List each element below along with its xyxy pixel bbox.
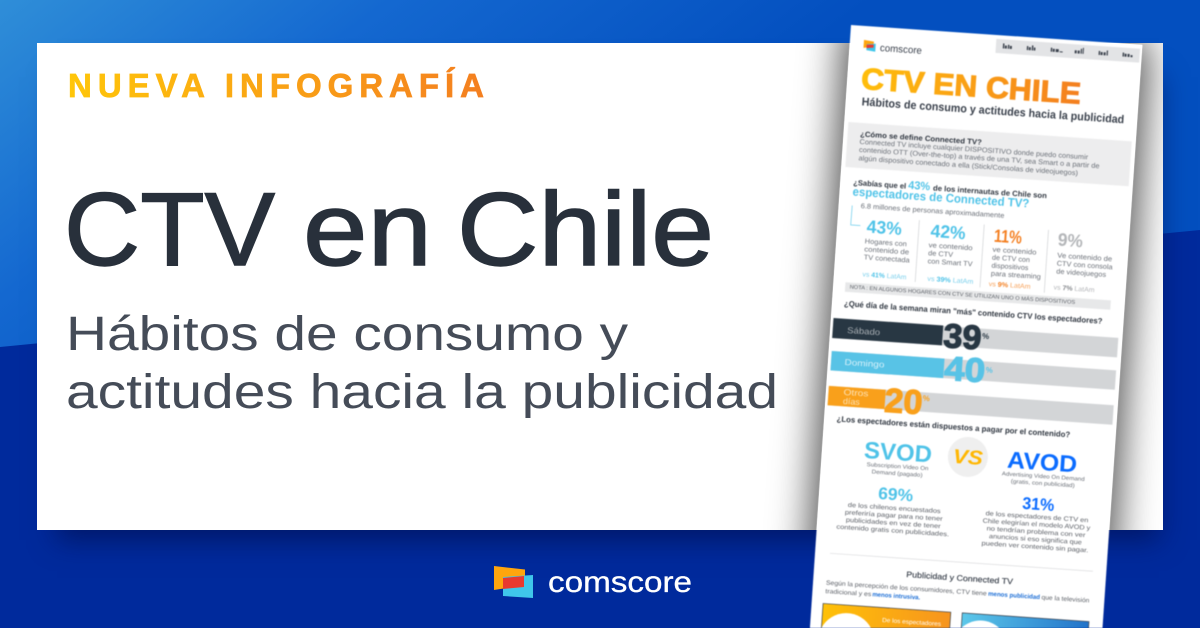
card: orange: De los espectadores [882, 618, 941, 628]
bar: otros días: 20 [883, 382, 924, 422]
panel: svod: Subscription Video On [866, 462, 929, 472]
stat: consola 9%: 9% [1057, 230, 1084, 251]
panel: avod: (gratis, con publicidad) [1011, 479, 1075, 489]
stat: streaming 11%: para streaming [991, 271, 1041, 281]
heading: 43%: 6.8 millones de personas aproximadamente [860, 203, 1005, 220]
bar: sábado [832, 310, 1119, 367]
comscore logo: comscore [548, 566, 692, 599]
document shadow [778, 43, 1163, 530]
stat: smart tv 42%: vs 39% LatAm [927, 276, 974, 286]
panel: avod: AVOD [1006, 447, 1078, 477]
stat: streaming 11%: vs 9% LatAm [988, 281, 1031, 291]
note bar: NOTA : EN ALGUNOS HOGARES CON CTV SE UTILIZAN UNO O MÁS DISPOSITIVOS [849, 284, 1076, 306]
stat: hogares 43%: 43% [866, 217, 902, 239]
heading: 43%: 43% [908, 180, 931, 193]
panel: svod: de los chilenos encuestados [848, 502, 941, 515]
bar: otros días: Otros [843, 387, 869, 399]
main title [64, 172, 714, 288]
panel: svod: preferiría pagar para no tener [845, 509, 944, 523]
document logo [863, 40, 923, 57]
stat: hogares 43% [862, 216, 913, 281]
stat: streaming 11%: dispositivos [991, 263, 1029, 272]
main title: Chile [457, 172, 714, 288]
stat: smart tv 42%: con Smart TV [927, 258, 973, 268]
stat: smart tv 42% [926, 221, 978, 286]
bar chart: days of the week [827, 310, 1119, 435]
stat: smart tv 42%: de CTV [928, 250, 954, 259]
main title: en [303, 172, 432, 288]
bar: sábado: % [982, 332, 989, 341]
document logo: comscore [880, 43, 923, 57]
bar: otros días [827, 378, 1114, 435]
bar: sábado: Sábado [847, 325, 881, 337]
subtitle: actitudes hacia la publicidad [66, 366, 778, 419]
panel: definition: algún dispositivo conectado a ella (Stick/Consolas de videojuegos) [858, 155, 1078, 177]
heading: 43% [851, 176, 1048, 223]
panel: svod: contenido gratis con publicidades. [836, 524, 950, 538]
stat: streaming 11%: ve contenido [992, 247, 1037, 257]
panel: avod: 31% [1022, 494, 1055, 515]
main title: CTV [64, 172, 275, 288]
panel: avod: anuncios si eso significa que [989, 533, 1083, 546]
heading: 43%: de los internautas de Chile son [933, 183, 1048, 200]
bar: domingo: Domingo [844, 357, 885, 370]
advertising text: tradicional y es [825, 588, 872, 598]
stat: hogares 43%: vs 41% LatAm [862, 271, 907, 281]
stat: streaming 11% [988, 226, 1044, 291]
advertising text: menos publicidad [988, 591, 1040, 601]
stat: hogares 43%: Hogares con [865, 238, 907, 248]
eyebrow: nueva infografía: NUEVA INFOGRAFÍA [68, 67, 484, 104]
panel: definition: contenido OTT (Over-the-top) a través de una TV, sea Smart o a partir de [859, 147, 1100, 170]
stat: smart tv 42%: 42% [930, 221, 966, 243]
panel: avod: pueden ver contenido sin pagar. [981, 540, 1089, 554]
panel: avod [981, 445, 1096, 554]
heading: 43%: espectadores de Connected TV? [852, 185, 1030, 211]
document subtitle: Hábitos de consumo y actitudes hacia la publicidad [861, 96, 1125, 126]
card: blue [961, 613, 1089, 628]
panel: definition: Connected TV incluye cualquier DISPOSITIVO donde puedo consumir [859, 139, 1089, 161]
partner logos strip [995, 39, 1140, 63]
subtitle: Hábitos de consumo y [66, 308, 628, 361]
stat: smart tv 42%: ve contenido [928, 242, 973, 252]
comscore logo [494, 566, 692, 599]
stat: consola 9% [1053, 230, 1115, 295]
arrow connector [851, 205, 862, 226]
panel: svod: 69% [878, 484, 914, 505]
heading: 43%: ¿Sabías que el [853, 178, 906, 191]
stat: streaming 11%: 11% [993, 226, 1023, 248]
panel: svod: SVOD [863, 437, 933, 467]
heading: día de la semana: ¿Qué día de la semana miran "más" contenido CTV los espectadores? [844, 299, 1103, 326]
panel: definition: ¿Cómo se define Connected TV? [860, 129, 983, 147]
advertising text [825, 580, 1090, 613]
panel: avod: Advertising Video On Demand [1002, 471, 1085, 483]
vs badge [947, 436, 989, 478]
stat: hogares 43%: contenido de [864, 246, 909, 256]
advertising text: menos intrusiva. [872, 591, 921, 602]
panel: avod: no tendrían problema con ver [986, 525, 1087, 539]
panel: avod: Chile elegirían el modelo AVOD y [982, 518, 1091, 532]
note bar [845, 282, 1111, 310]
stat: hogares 43%: TV conectada [863, 254, 910, 265]
heading: pagar: ¿Los espectadores están dispuestos a pagar por el contenido? [836, 414, 1071, 439]
bar: otros días: días [843, 396, 860, 407]
card: orange [821, 603, 951, 628]
bar: domingo: % [986, 365, 993, 375]
stat: consola 9%: de videojuegos [1056, 269, 1107, 279]
advertising text: Según la percepción de los consumidores, CTV tiene [826, 580, 987, 598]
bar: domingo: 40 [943, 350, 987, 390]
stat: consola 9%: vs 7% LatAm [1053, 284, 1095, 294]
panel: svod: Demand (pagado) [871, 469, 923, 479]
bar: sábado: 39 [942, 317, 983, 358]
bar: domingo [830, 342, 1117, 399]
panel: svod [836, 435, 956, 538]
white card [37, 43, 1163, 530]
bar: otros días: % [922, 394, 930, 403]
stat: streaming 11%: de CTV con [992, 255, 1030, 264]
panel: svod: publicidades en vez de tener [846, 517, 942, 530]
stat: consola 9%: CTV con consola [1056, 261, 1113, 271]
advertising text: que la televisión [1041, 594, 1090, 605]
panel: avod: de los espectadores de CTV en [985, 510, 1089, 524]
heading: publicidad y connected tv: Publicidad y Connected TV [906, 570, 1014, 586]
document title: CTV EN CHILE [860, 63, 1082, 111]
panel: definition [845, 122, 1132, 186]
stat: consola 9%: Ve contenido de [1057, 253, 1112, 263]
vs badge: VS [952, 446, 984, 470]
subtitle [66, 308, 778, 419]
